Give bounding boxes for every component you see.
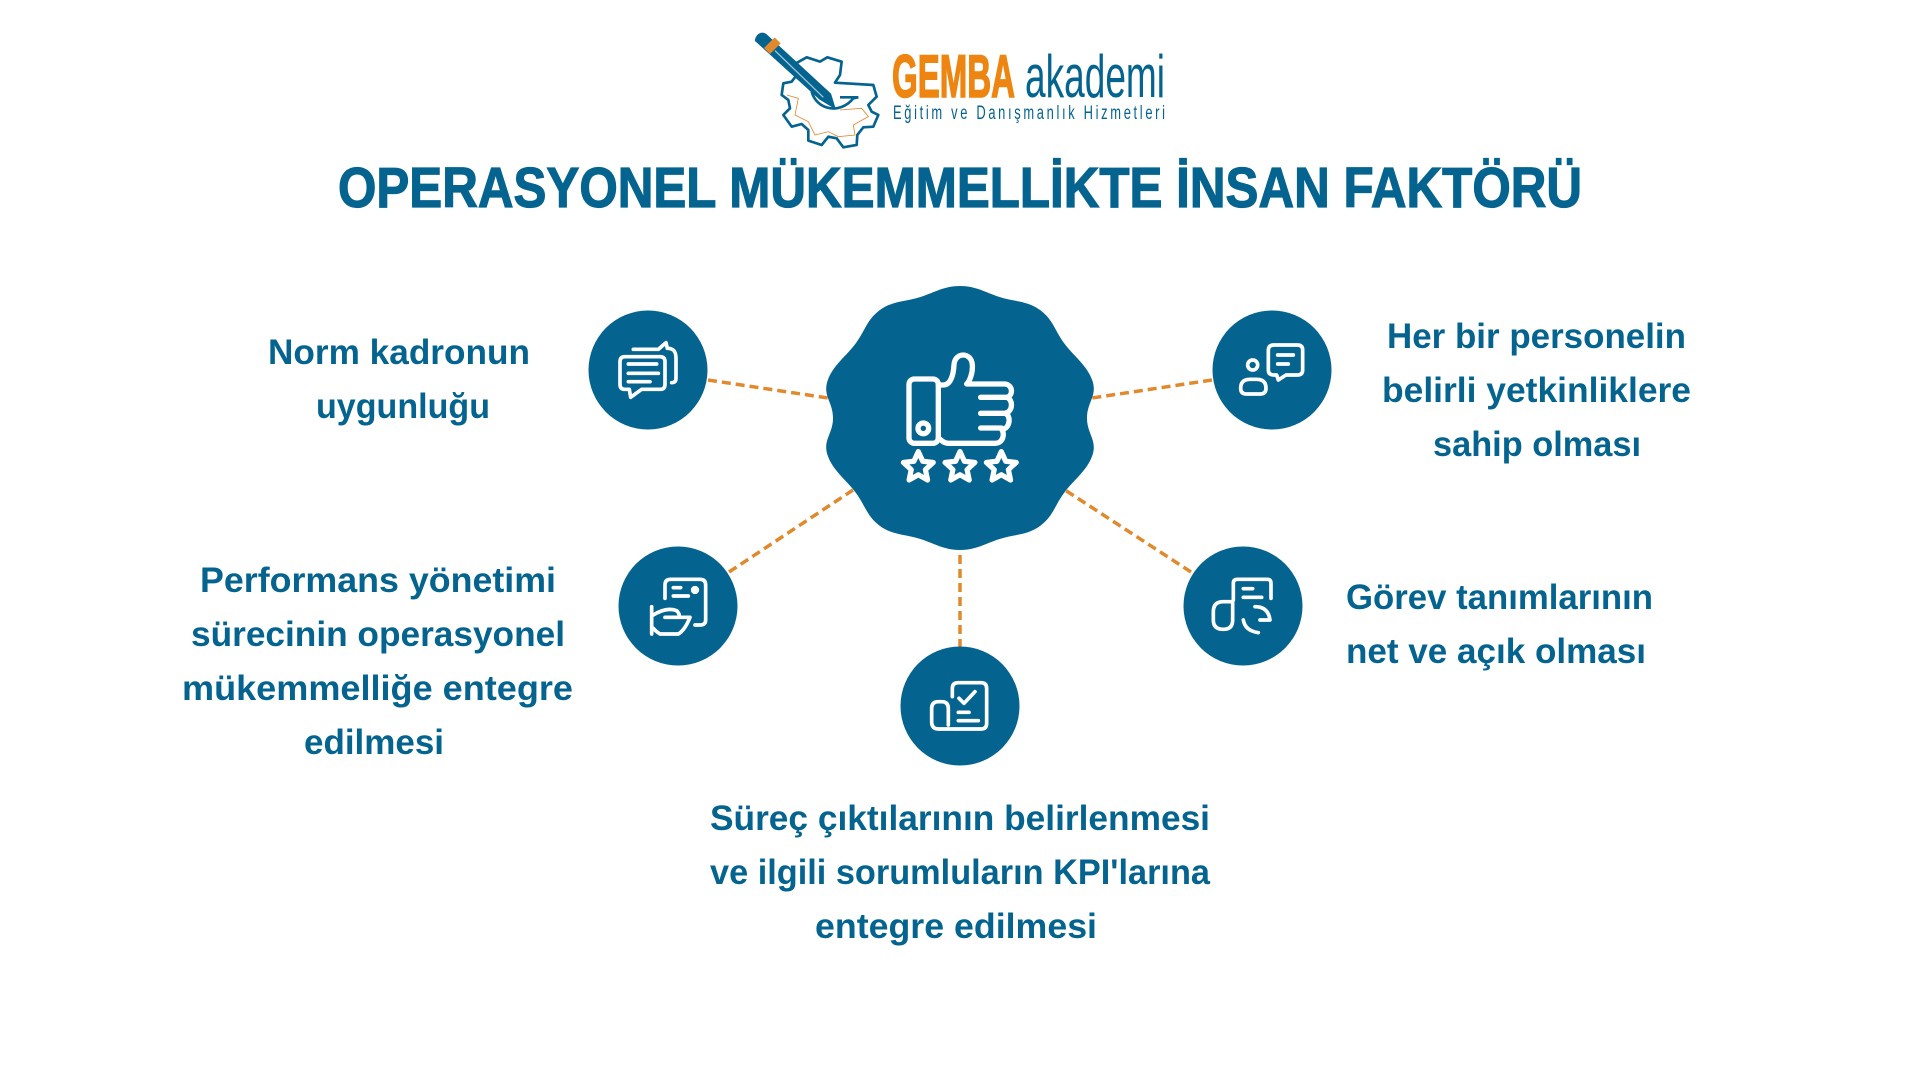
circle (1212, 310, 1332, 430)
label: mükemmelliğe entegre (182, 669, 573, 708)
label: belirli yetkinliklere (1382, 371, 1691, 410)
label: entegre edilmesi (815, 907, 1097, 946)
label: Performans yönetimi (200, 561, 556, 600)
node: süreç çıktıları (710, 646, 1211, 946)
label (182, 561, 573, 762)
label: Norm kadronun (268, 333, 530, 372)
label: sahip olması (1433, 425, 1641, 464)
label (1382, 317, 1691, 464)
icon: thumbs up with three stars (903, 355, 1016, 480)
icon: hand holding document (652, 579, 706, 634)
icon: speech bubbles (620, 343, 676, 397)
logo wordmark akademi: akademi (1025, 43, 1165, 110)
icon: pencil and gear (755, 33, 878, 147)
icon: checklist document (932, 683, 987, 729)
icon: document with refresh (1213, 579, 1271, 633)
circle (900, 646, 1020, 766)
label: Her bir personelin (1387, 317, 1686, 356)
label: sürecinin operasyonel (191, 615, 565, 654)
label (268, 333, 530, 426)
label: ve ilgili sorumluların KPI'larına (710, 853, 1211, 892)
label (710, 799, 1211, 946)
logo: Gemba Akademi (755, 33, 1165, 147)
icon: person with speech bubble (1241, 345, 1303, 394)
badge shape (826, 286, 1094, 550)
label: Süreç çıktılarının belirlenmesi (710, 799, 1210, 838)
logo tagline: Eğitim ve Danışmanlık Hizmetleri (893, 103, 1165, 124)
node: yetkinlikler (1212, 310, 1691, 464)
node: görev tanımları (1184, 546, 1653, 671)
connectors (708, 380, 1212, 647)
circle (618, 546, 738, 666)
label: Görev tanımlarının (1346, 578, 1653, 617)
label: edilmesi (304, 723, 444, 762)
node: performans yönetimi (182, 546, 738, 762)
title: OPERASYONEL MÜKEMMELLİKTE İNSAN FAKTÖRÜ (338, 156, 1582, 220)
circle (1184, 546, 1302, 666)
logo wordmark GEMBA: GEMBA (892, 43, 1015, 110)
label: uygunluğu (316, 387, 490, 426)
label: net ve açık olması (1346, 632, 1646, 671)
circle (588, 310, 708, 430)
node: norm kadro (268, 310, 708, 430)
label (1346, 578, 1653, 671)
central badge (826, 286, 1094, 550)
